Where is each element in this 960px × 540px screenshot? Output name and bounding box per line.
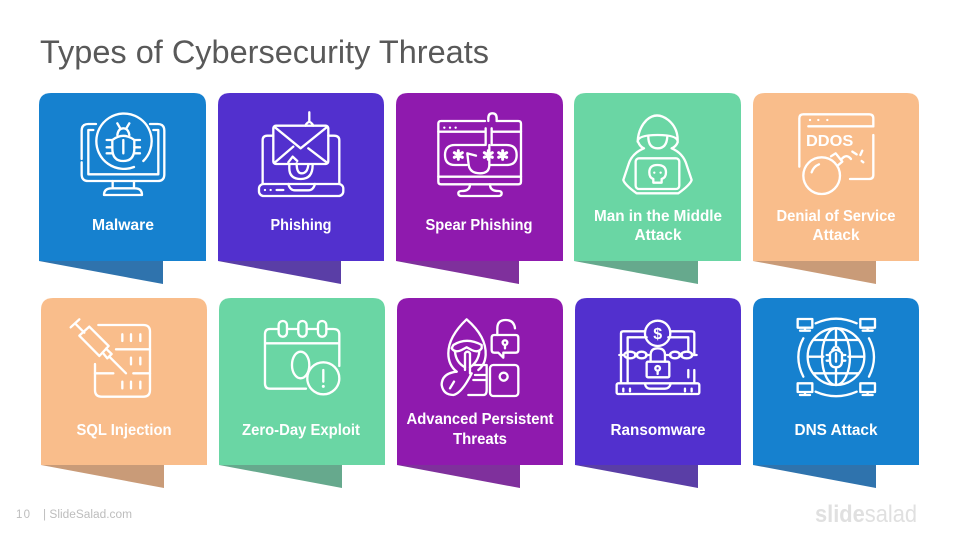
label: Man in the Middle xyxy=(594,208,722,225)
card body xyxy=(39,93,206,261)
label: Denial of Service xyxy=(776,208,896,225)
card: Zero-Day Exploit xyxy=(219,298,385,488)
card tail xyxy=(219,465,342,488)
card: Advanced Persistent Threats xyxy=(397,298,563,488)
label xyxy=(406,411,554,448)
label: Spear Phishing xyxy=(426,217,532,234)
card body xyxy=(574,93,741,261)
card: Malware xyxy=(39,93,206,284)
card body xyxy=(397,298,563,465)
label: Threats xyxy=(453,431,507,448)
card tail xyxy=(753,465,876,488)
card: SQL Injection xyxy=(41,298,207,488)
label: Malware xyxy=(92,217,154,234)
card body xyxy=(218,93,384,261)
card: Ransomware xyxy=(575,298,741,488)
card: DNS Attack xyxy=(753,298,919,488)
card tail xyxy=(574,261,698,284)
icon: syringe into database xyxy=(71,319,150,397)
icon: locked laptop with ransom: $ xyxy=(653,326,662,343)
card: Man in the Middle Attack xyxy=(574,93,741,284)
icon: calendar with zero and alert xyxy=(265,321,339,394)
label: DNS Attack xyxy=(794,422,878,439)
card: Spear Phishing xyxy=(396,93,563,284)
label xyxy=(776,208,896,244)
card body xyxy=(575,298,741,465)
icon: hooded hacker with laptop xyxy=(623,115,692,193)
label: Advanced Persistent xyxy=(406,411,554,428)
label: Attack xyxy=(812,227,860,244)
icon: locked laptop with ransom xyxy=(617,321,699,394)
label: Zero-Day Exploit xyxy=(242,422,361,439)
label: Ransomware xyxy=(610,422,706,439)
card body xyxy=(753,93,919,261)
card tail xyxy=(397,465,520,488)
card body xyxy=(753,298,919,465)
card tail xyxy=(396,261,519,284)
card: Denial of Service Attack xyxy=(753,93,919,284)
icon: password window with hook xyxy=(438,113,521,196)
icon: monitor with bug xyxy=(82,114,164,195)
card body xyxy=(219,298,385,465)
card body xyxy=(41,298,207,465)
footer: site name: | SlideSalad.com xyxy=(43,509,132,521)
icon: DDOS window with bomb xyxy=(799,114,873,194)
icon: globe with bug and network xyxy=(798,319,875,396)
title: Types of Cybersecurity Threats xyxy=(40,34,489,70)
card body xyxy=(396,93,563,261)
card: Phishing xyxy=(218,93,384,284)
footer: page number: 10 xyxy=(16,509,30,521)
card tail xyxy=(575,465,698,488)
icon: DDOS window with bomb: DDOS xyxy=(806,133,853,150)
label: Attack xyxy=(634,227,682,244)
label: SQL Injection xyxy=(76,422,172,439)
logo: slidesalad: slidesalad xyxy=(815,501,917,528)
icon: hacker with lock and laptop xyxy=(442,319,518,396)
card tail xyxy=(39,261,163,284)
card tail xyxy=(753,261,876,284)
label xyxy=(594,208,722,244)
card tail xyxy=(41,465,164,488)
icon: envelope on laptop with hook xyxy=(259,112,343,196)
label: Phishing xyxy=(270,217,332,234)
card tail xyxy=(218,261,341,284)
